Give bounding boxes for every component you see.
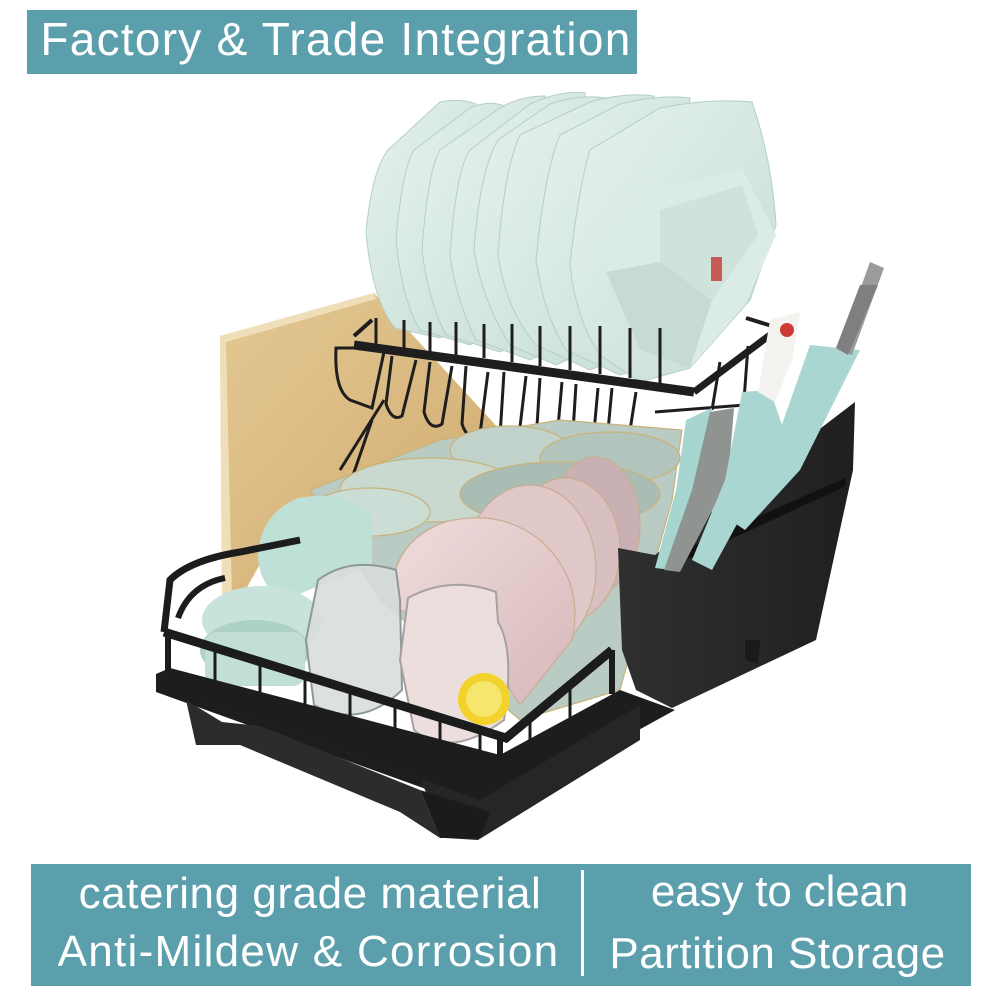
feature banner xyxy=(31,864,971,986)
title banner xyxy=(27,10,637,74)
front plate facets xyxy=(606,168,776,368)
cutlery and utensils xyxy=(655,262,884,572)
cutlery caddy xyxy=(618,402,855,708)
feature: catering grade material: catering grade material xyxy=(79,869,541,918)
feature: partition storage: Partition Storage xyxy=(609,929,946,978)
lower tier bowls stack xyxy=(310,420,682,720)
lemon slice xyxy=(458,673,510,725)
pink plates xyxy=(392,457,640,705)
title text: Factory & Trade Integration xyxy=(40,13,632,65)
glass jars xyxy=(306,565,508,743)
plate label mark xyxy=(711,257,722,281)
upper tier plates xyxy=(366,92,776,382)
upper rack wire xyxy=(336,318,772,484)
lower rack tray xyxy=(156,668,675,840)
feature: anti-mildew and corrosion: Anti-Mildew & Corrosion xyxy=(58,927,559,976)
feature: easy to clean: easy to clean xyxy=(651,867,908,916)
small bowls left xyxy=(200,586,322,686)
large teal bowl xyxy=(258,496,372,600)
lower rack wire frame xyxy=(164,540,612,786)
cutting board xyxy=(220,293,500,600)
